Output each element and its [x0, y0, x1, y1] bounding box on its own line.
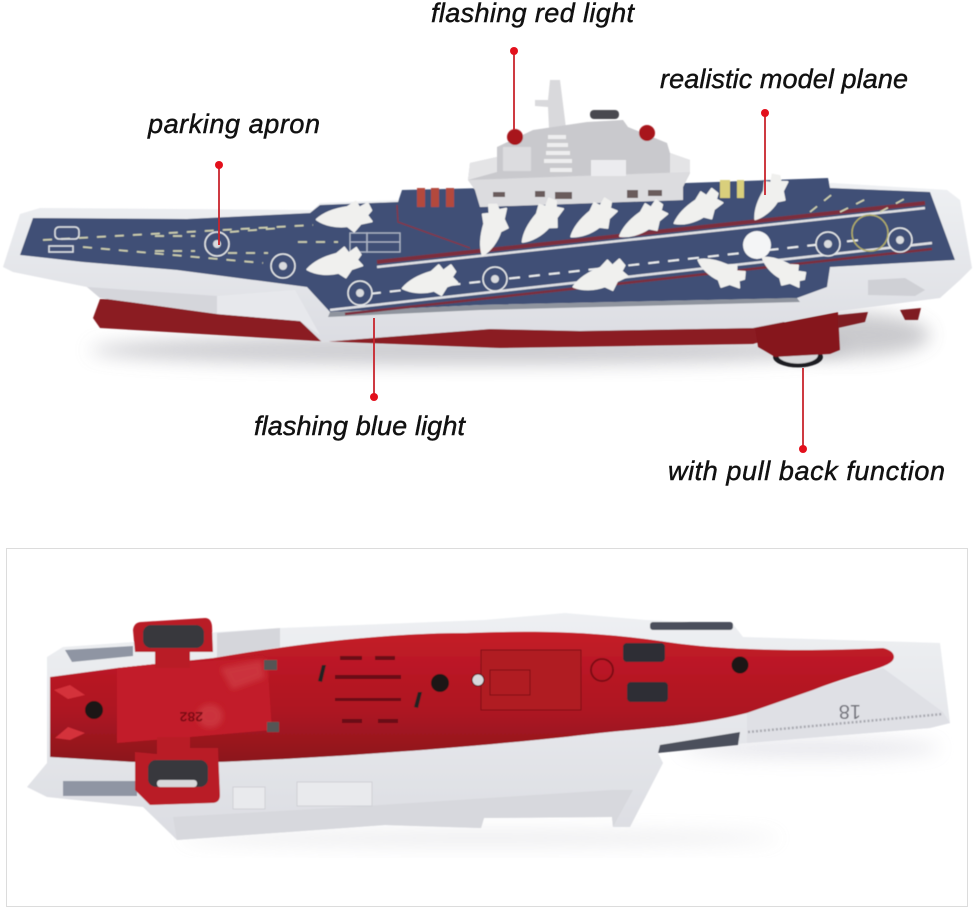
rear wheel bottom	[148, 760, 208, 787]
stern recesses	[63, 646, 137, 796]
deck number boxes	[350, 233, 400, 252]
island body	[468, 120, 690, 207]
label: with pull back function	[668, 368, 945, 486]
battery cover	[472, 650, 581, 710]
red deck blocks	[417, 188, 454, 207]
red lower hull	[93, 299, 800, 348]
bow deck dashes	[43, 192, 910, 263]
rear wheel	[773, 346, 823, 368]
stair tower	[544, 137, 572, 170]
white model jets	[306, 171, 809, 298]
label: parking apron	[147, 109, 320, 245]
bow shadow	[680, 738, 940, 758]
island superstructure	[468, 80, 690, 207]
label: realistic model plane	[660, 64, 908, 195]
hull shading	[87, 287, 222, 314]
island base deck	[468, 172, 690, 207]
embossed numbers: 18	[839, 700, 861, 722]
lower hull ribbed band	[173, 790, 633, 840]
label: parking apron: parking apron	[147, 109, 320, 139]
bow lower panel	[747, 668, 950, 743]
deck dark edge	[328, 298, 800, 317]
red beacon left	[507, 129, 523, 145]
rear axle bracket bottom	[135, 737, 220, 805]
front wheels	[623, 643, 668, 702]
hull holes	[85, 656, 748, 719]
label: with pull back function: with pull back function	[668, 456, 945, 486]
top ribbed section	[217, 628, 280, 657]
stern fins	[54, 685, 85, 740]
square sockets	[264, 660, 279, 732]
hull step block	[217, 290, 320, 335]
ground shadow	[90, 335, 850, 365]
label: realistic model plane: realistic model plane	[660, 64, 908, 94]
hull slots	[318, 656, 422, 723]
angled deck stripes	[330, 203, 932, 314]
panel frame	[6, 548, 968, 906]
white deck disc	[743, 231, 771, 259]
label: flashing blue light: flashing blue light	[254, 411, 466, 441]
stern fittings	[868, 278, 925, 296]
bow rib line	[748, 714, 943, 732]
bow marking	[49, 227, 79, 252]
embossed numbers	[179, 700, 861, 725]
label: flashing red light	[431, 0, 635, 130]
circle centres	[213, 236, 904, 297]
dark recesses	[650, 622, 740, 753]
island side wings	[468, 153, 690, 180]
round logo	[591, 659, 613, 681]
island windows	[493, 190, 662, 199]
front box	[503, 147, 531, 171]
radar panel	[590, 110, 619, 119]
soft shadow	[180, 830, 780, 846]
recess panels	[233, 782, 372, 809]
red beacon right	[639, 125, 655, 141]
white hull and flight deck edge	[3, 183, 972, 342]
rear hull details	[838, 308, 921, 328]
rear axle bracket top	[133, 618, 213, 668]
stern shadow	[770, 313, 930, 357]
red hull underside	[50, 632, 894, 762]
rear wheel top	[143, 625, 204, 648]
stern raised plate	[117, 658, 272, 743]
mast	[535, 80, 568, 150]
bottom panel: underside view	[27, 613, 950, 846]
embossed numbers: 282	[179, 709, 203, 725]
top panel: side view of the carrier	[3, 80, 972, 368]
label: flashing blue light	[254, 318, 466, 441]
gloss highlights	[197, 660, 265, 728]
landing circles	[205, 215, 912, 305]
yellow deck blocks	[720, 180, 744, 198]
navy flight deck	[20, 178, 955, 312]
pull back housing	[755, 312, 840, 357]
white hull underside	[27, 613, 950, 840]
bridge window block	[591, 160, 626, 176]
